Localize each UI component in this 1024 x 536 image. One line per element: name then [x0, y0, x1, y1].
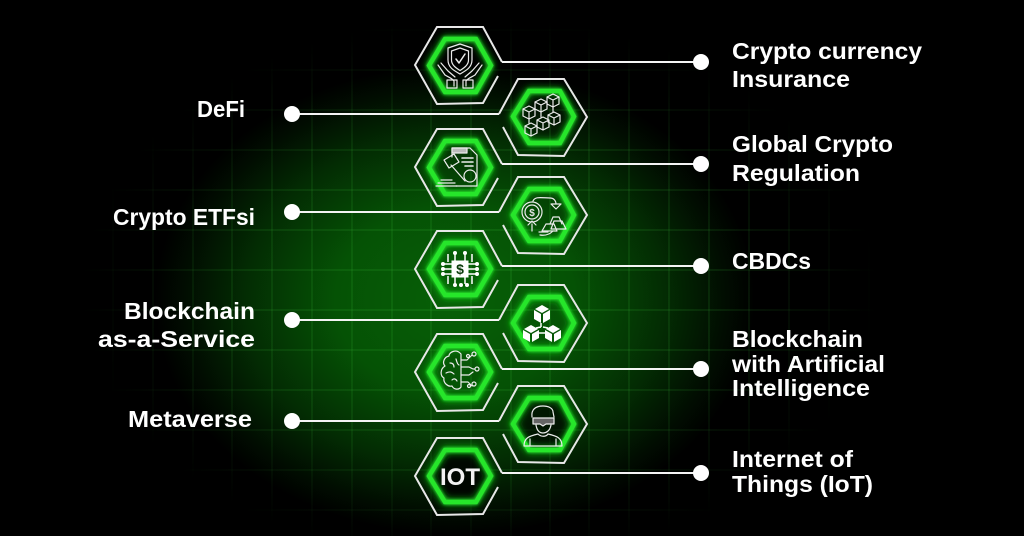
icon: dollar chip: [441, 251, 479, 287]
label: Internet of Things (IoT): Internet of: [732, 446, 853, 472]
item: Global Crypto Regulation: [415, 129, 709, 206]
label: Internet of Things (IoT): [732, 446, 873, 497]
item: Metaverse: [284, 386, 587, 463]
label: Blockchain as-a-Service: as-a-Service: [98, 326, 255, 352]
icon: coin swap to gold: [522, 198, 566, 235]
label: CBDCs: CBDCs: [732, 248, 811, 274]
label: Global Crypto Regulation: Regulation: [732, 160, 860, 186]
label: Blockchain as-a-Service: [98, 298, 255, 352]
icon: shield and hands: [438, 44, 482, 88]
label: Blockchain with Artificial Intelligence: with Artificial: [731, 351, 885, 377]
label: Blockchain with Artificial Intelligence: Intelligence: [732, 375, 870, 401]
label: Crypto currency Insurance: Insurance: [732, 66, 850, 92]
item: Blockchain as-a-Service: [284, 285, 587, 362]
icon: dollar chip: $: [456, 261, 464, 277]
item: DeFi: [284, 79, 587, 156]
icon: blocks network: [523, 94, 560, 136]
item: Crypto ETFsi: [284, 177, 587, 254]
item: CBDCs: [415, 231, 709, 308]
label: Metaverse: Metaverse: [128, 406, 252, 432]
label: Blockchain as-a-Service: Blockchain: [124, 298, 255, 324]
icon: three cubes: [523, 305, 561, 342]
label: Global Crypto Regulation: Global Crypto: [732, 131, 893, 157]
label: Crypto currency Insurance: [732, 38, 922, 92]
label: Crypto ETFsi: Crypto ETFsi: [113, 204, 255, 230]
icon: coin swap to gold: $: [529, 208, 535, 219]
icon: VR headset person: [524, 406, 562, 446]
item: Blockchain with Artificial Intelligence: [415, 334, 709, 411]
item: Internet of Things (IoT): [415, 438, 709, 515]
label: Blockchain with Artificial Intelligence: [731, 326, 885, 401]
label: Crypto currency Insurance: Crypto currency: [732, 38, 922, 64]
icon: brain circuit: [441, 351, 479, 389]
label: Global Crypto Regulation: [732, 131, 893, 186]
icon: gavel and document: [436, 148, 477, 186]
item: Crypto currency Insurance: [415, 27, 709, 104]
label: Internet of Things (IoT): Things (IoT): [732, 471, 873, 497]
label: DeFi: DeFi: [197, 96, 245, 122]
icon: IOT label: IOT: [440, 464, 480, 491]
label: Blockchain with Artificial Intelligence: Blockchain: [732, 326, 863, 352]
